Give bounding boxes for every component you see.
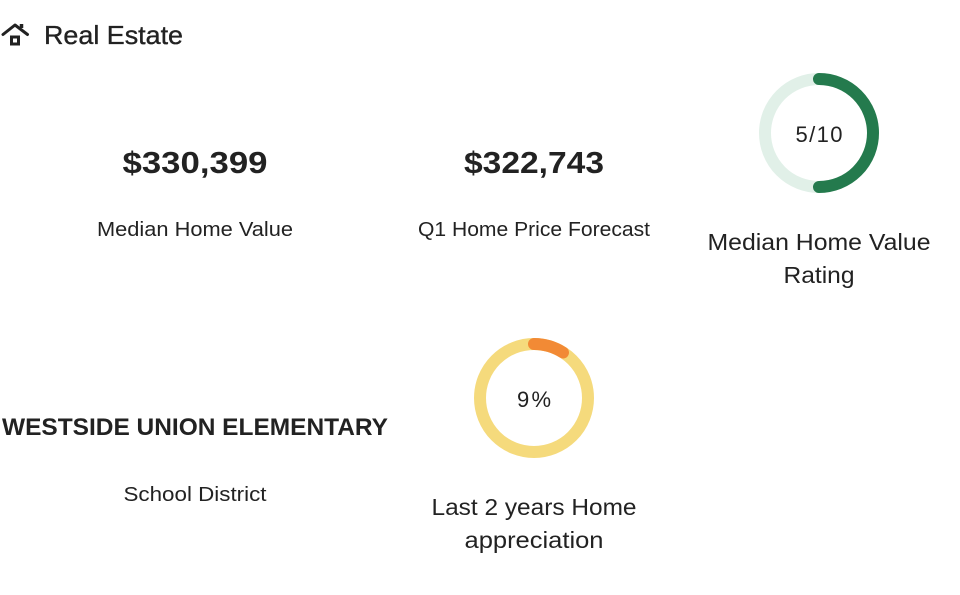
gauge: median home value rating: [708, 79, 930, 288]
gauge label: Median Home Value: [708, 229, 930, 255]
gauge: last 2 years home appreciation: appreciation: [464, 527, 604, 553]
heading text: Real Estate: [44, 20, 183, 50]
gauge: last 2 years home appreciation: [432, 344, 636, 553]
label: Q1 Home Price Forecast: [418, 219, 650, 241]
gauge value: 5/10: [796, 122, 842, 147]
value: $330,399: [122, 145, 268, 180]
icon: house: [3, 24, 28, 44]
metric: median home value: [97, 145, 293, 241]
value: $322,743: [464, 145, 604, 180]
gauge value: 9%: [517, 387, 551, 412]
label: Median Home Value: [97, 219, 293, 241]
ring track: [480, 344, 588, 452]
gauge: median home value rating: Rating: [784, 262, 854, 288]
heading: Real Estate with house icon: [3, 20, 183, 50]
ring progress: [534, 344, 563, 352]
label: School District: [124, 484, 267, 506]
metric: Q1 home price forecast: [418, 145, 650, 241]
gauge label: Last 2 years Home: [432, 494, 636, 520]
ring track: [765, 79, 873, 187]
ring progress: [819, 79, 873, 187]
metric: school district: [2, 414, 388, 506]
value: WESTSIDE UNION ELEMENTARY: [2, 414, 388, 441]
